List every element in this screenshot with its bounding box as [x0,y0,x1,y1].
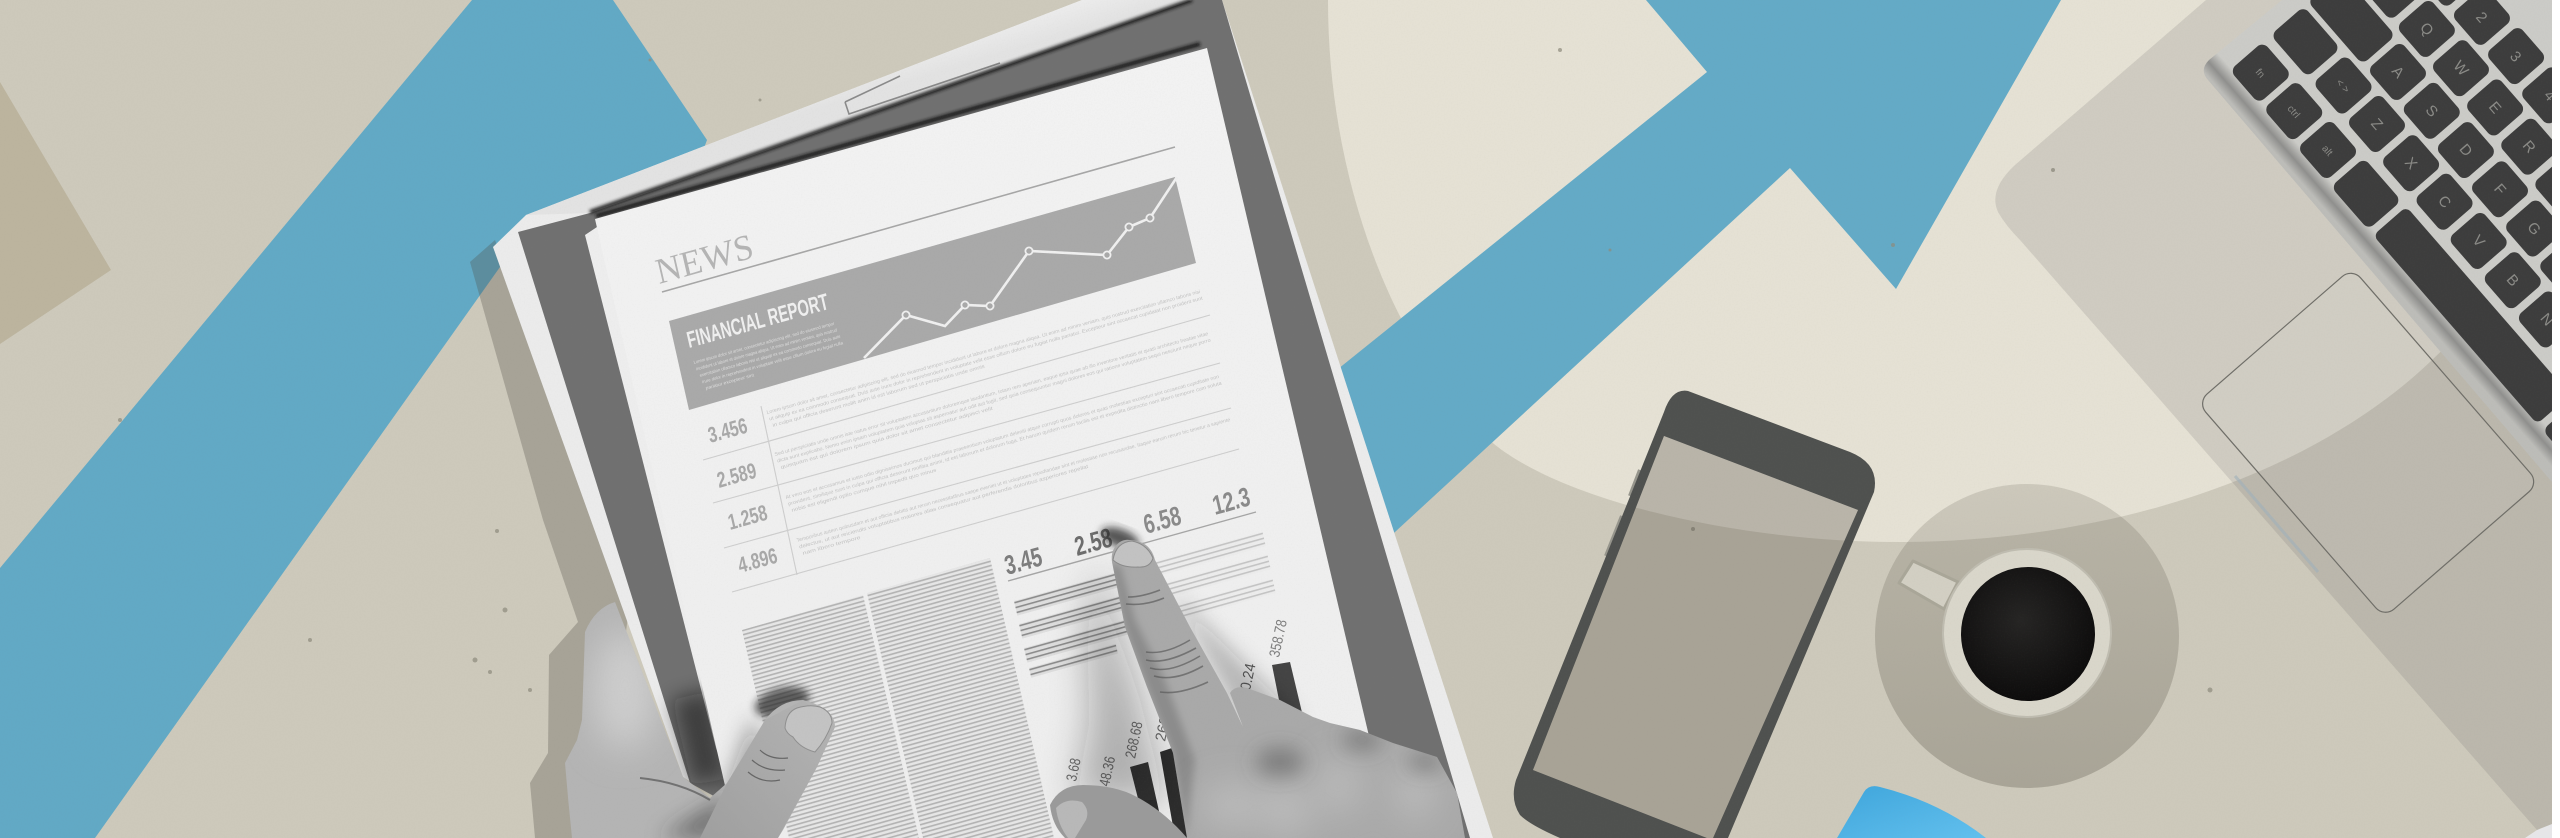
shape: light circle [1328,0,2560,542]
paragraph 2 right of finger [1144,555,1271,604]
heading: NEWS: NEWS [652,226,757,292]
hand shading [593,630,835,838]
paragraph 3 right of finger [1149,579,1276,628]
bar label: 48.36: 48.36 [1096,755,1119,788]
paragraph 1 right of finger [1139,532,1266,581]
keyboard keys: 3 [2506,48,2524,65]
shadow: folder and hand on desk [470,240,630,838]
keyboard keys: V [2469,232,2488,251]
phone body and bezels [1514,391,1875,838]
finger creases [1126,590,1208,693]
laptop [1995,0,2560,838]
banner small text [693,320,845,392]
table row text 2: Sed ut perspiciatis unde omnis iste natus error sit voluptatem accusantium doloremque laudantium, totam rem aperiam, eaque ipsa quae ab illo inventore veritatis et quasi architecto beatae vitae [774,331,1209,458]
table row text 3: nobis est eligendi optio cumque nihil impedit quo minus [791,467,938,514]
thumb nail [785,706,832,752]
lower thumb nail [1056,800,1087,838]
keyboard metal bed [2204,0,2552,482]
top band crease [845,63,1000,114]
keyboard keys: D [2456,141,2476,160]
arrow: right blue arrow with head [1290,0,2061,630]
keyboard keys: A [2388,63,2407,82]
thumb shadow [751,681,813,723]
banner title: FINANCIAL REPORT [684,288,831,353]
fingertip shadow [1098,523,1142,553]
keyboard keys: W [2450,58,2472,80]
figure: 12.3: 12.3 [1210,481,1253,521]
shadow right of finger [1170,590,1300,727]
trackpad outline [2197,268,2539,618]
table row text 2: dicta sunt explicabo. Nemo enim ipsam voluptatem quia voluptas sit aspernatur aut odit aut fugit, sed quia consequuntur magni dolores eos qui ratione voluptatem sequi nesciunt neque porro [777,338,1212,464]
rule under heading [662,147,1175,292]
keyboard keys: < > [2334,77,2351,96]
bar label: 268: 268 [1152,715,1174,743]
phone [1514,391,1875,838]
banner small text: exercitation ullamco laboris nisi ut aliquip ex ea commodo consequat. Duis aute [699,334,841,378]
white margin at right edge [2552,0,2560,838]
folder with report [493,0,1493,838]
lower thumb [1050,785,1187,838]
table row text 3: provident, similique sunt in culpa qui officia deserunt mollitia animi, id est laborum et dolorum fuga. Et harum quidem rerum facilis est et expedita distinctio nam libero tempore cum soluta [788,381,1223,507]
keyboard keys: alt [2319,143,2335,159]
second sheet under report [585,225,735,800]
keyboard keys: 4 [2540,87,2559,105]
right hand pointing [1050,540,1465,838]
coffee cup [1899,549,2111,717]
bar label: 3.68: 3.68 [1063,757,1085,783]
white corner at bottom right [2525,824,2552,838]
folder shade near thumb [672,690,728,786]
table row text 3: At vero eos et accusamus et iusto odio dignissimos ducimus qui blanditiis praesentium voluptatum deleniti atque corrupti quos dolores et quas molestias excepturi sint occaecati cupiditate non [785,374,1220,501]
finger left edge shade [1110,565,1195,838]
banner small text: Lorem ipsum dolor sit amet, consectetur adipiscing elit, sed do eiusmod tempor [693,321,835,365]
keyboard keys: S [2422,102,2441,121]
banner: financial report chart [669,177,1196,410]
chart markers [902,214,1154,319]
phone screen [1533,436,1858,838]
banner small text: irure dolor in reprehenderit in voluptate velit esse cillum dolore eu fugiat nulla [702,340,844,384]
banner small text: incididunt ut labore et dolore magna aliqua. Ut enim ad minim veniam, quis nostrud [696,327,838,372]
keyboard keys: E [2485,98,2504,117]
knuckle and vein highlights [1208,766,1432,832]
table row text 4: Temporibus autem quibusdam et aut officiis debitis aut rerum necessitatibus saepe eveniet ut et voluptates repudiandae sint et molestiae non recusandae. Itaque earum rerum hic tenetur a sapiente [796,417,1231,544]
figure: 1.258: 1.258 [725,500,770,535]
bar label: 358.78: 358.78 [1266,618,1291,659]
keyboard keys: X [2401,154,2420,173]
table row text 1: Lorem ipsum dolor sit amet, consectetur adipiscing elit, sed do eiusmod tempor incididunt ut labore et dolore magna aliqua. Ut enim ad minim veniam, quis nostrud exercitation ullamco laboris nisi [766,289,1201,416]
banner small text: pariatur excepteur sint [705,372,755,391]
table rules [703,315,1239,592]
table row text 1: in culpa qui officia deserunt mollit anim id est laborum sed ut perspiciatis unde omnis [772,364,986,429]
figure: 4.896: 4.896 [735,543,780,578]
shape: tan quadrilateral at left [0,82,111,344]
phone side buttons [1606,470,1640,556]
paragraph 4 [1029,644,1118,678]
paragraph 2 left of finger [1019,589,1148,639]
table row text 1: ut aliquip ex ea commodo consequat. Duis aute irure dolor in reprehenderit in voluptate velit esse cillum dolore eu fugiat nulla pariatur. Excepteur sint occaecat cupidatat non proident sunt [769,295,1204,422]
dark gray inner folder [518,0,1470,838]
palm highlight [593,630,657,750]
thumb body [700,723,822,838]
keyboard keys: R [2519,137,2539,157]
figure: 2.589: 2.589 [714,458,759,493]
figure: 2.58: 2.58 [1072,522,1115,562]
bar chart [1063,618,1305,838]
laptop body overlay [1995,0,2552,838]
thumb creases [748,750,788,781]
keyboard keys: B [2503,271,2522,290]
key figures row [1002,481,1256,581]
keyboard keys: N [2537,310,2557,329]
keyboard keys: Q [2416,19,2437,39]
desk speckles [118,48,2212,692]
hand and index finger silhouette [1112,540,1465,838]
bar label: 268.68: 268.68 [1122,720,1147,760]
table row text 4: delectus, ut aut reiciendis voluptatibus maiores alias consequatur aut perferendis doloribus asperiores repellat [799,464,1090,550]
shadow line above gray folder [590,0,1192,212]
fist darkening [660,795,730,838]
saucer shadow circle [1875,484,2179,788]
keyboard keys: F [2490,181,2509,199]
keyboard keys: ctrl [2285,103,2302,121]
coffee [1961,567,2095,701]
text column 2 [867,558,1054,838]
bars [1130,662,1305,838]
left hand holding folder [565,602,835,838]
palm and thumb silhouette [565,602,835,838]
cup rim [1943,549,2111,717]
rule under figures [1008,512,1256,581]
banner line chart [864,177,1177,358]
table of figures [703,289,1239,592]
figure: 6.58: 6.58 [1141,500,1184,540]
keyboard keys: fn [2253,67,2267,80]
text column 1 [742,595,919,838]
banner background [669,177,1196,410]
keyboard keys: C [2434,192,2454,212]
thumb crease [640,778,710,800]
left thumb soft shadow [725,716,780,830]
paragraph 1 left of finger [1014,566,1143,616]
shadow line above report page [596,44,1200,216]
hand shading [1110,565,1443,838]
keyboard keys: Z [2367,115,2386,133]
figure: 3.456: 3.456 [705,413,750,448]
table row text 2: quisquam est qui dolorem ipsum quia dolor sit amet consectetur adipisci velit [780,406,994,471]
paragraph blocks under figures [1014,532,1276,678]
blue object at bottom edge [1837,786,1986,838]
figure: 3.45: 3.45 [1002,541,1045,581]
index finger soft shadow [1075,565,1165,800]
top band shading [526,0,1190,215]
keyboard keys: G [2524,219,2544,239]
keyboard keys: 2 [2472,9,2490,26]
paragraph 3 left of finger [1024,613,1153,663]
cup handle [1899,561,1958,609]
arrow: left blue band [0,0,707,838]
hand shadows on page [725,523,1300,830]
laptop hinge highlight [2235,476,2318,572]
knuckle darks [1256,730,1443,776]
keyboard keys [2231,0,2560,461]
finger nail [1113,541,1153,567]
white outer folder [493,0,1493,838]
table row text 4: nam libero tempore [802,535,862,557]
bar label: 0.24: 0.24 [1237,662,1260,692]
report page [595,48,1393,838]
